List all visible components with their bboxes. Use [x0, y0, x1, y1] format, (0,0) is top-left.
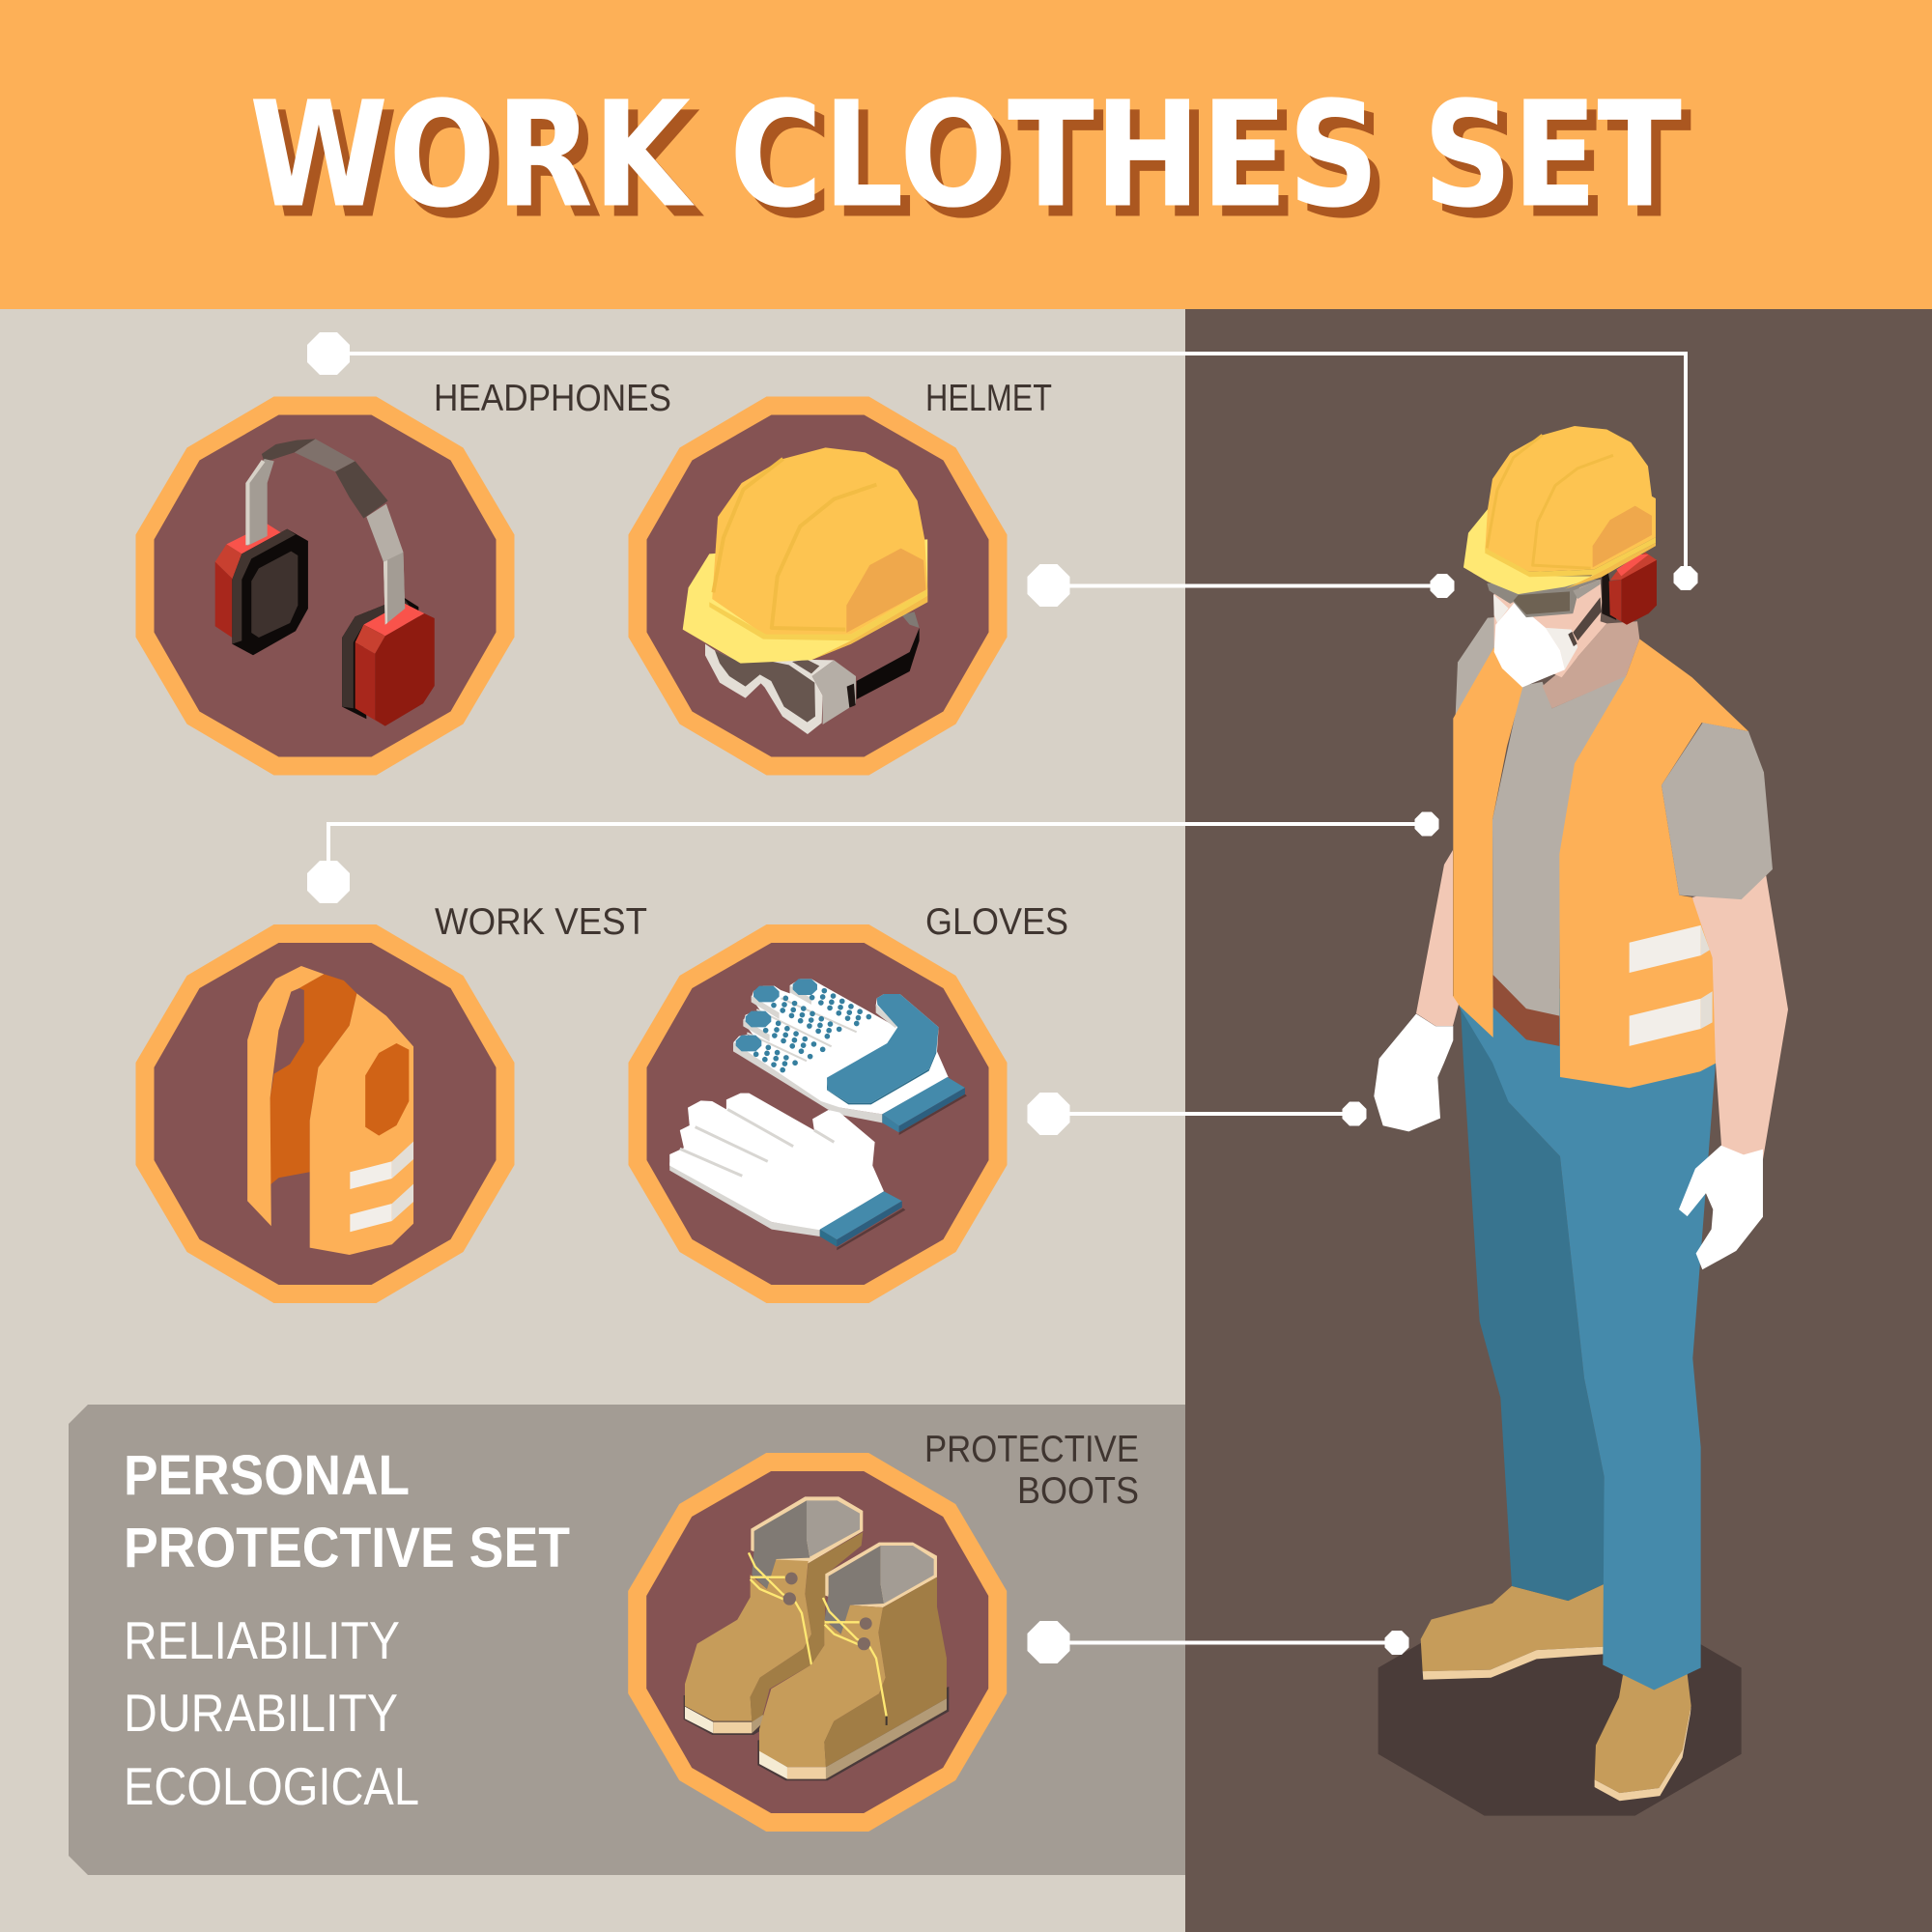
badge: gloves	[628, 924, 1007, 1303]
badge: helmet	[628, 396, 1007, 775]
title: WORK	[249, 70, 695, 240]
label: protective boots: PROTECTIVE	[924, 1429, 1139, 1470]
label: work vest: WORK VEST	[435, 901, 647, 943]
icon: goggles	[705, 611, 920, 734]
title: SET	[1423, 70, 1682, 240]
icon: plain glove	[669, 1094, 905, 1250]
badge: work vest	[135, 924, 514, 1303]
worker head with mask and goggles	[1487, 553, 1657, 687]
badge: headphones	[135, 396, 514, 775]
connector: work vest	[307, 811, 1439, 903]
label: protective boots: BOOTS	[1017, 1470, 1139, 1512]
arm and glove: left	[1374, 850, 1460, 1131]
text block: personal protective set: DURABILITY	[124, 1683, 398, 1743]
connector: gloves	[1028, 1093, 1366, 1135]
text block: personal protective set: PROTECTIVE SET	[124, 1517, 570, 1579]
text block: personal protective set	[124, 1444, 570, 1816]
text block: personal protective set: ECOLOGICAL	[124, 1756, 419, 1816]
title	[249, 70, 1691, 251]
worker helmet	[1463, 426, 1656, 594]
icon: boots	[684, 1496, 949, 1780]
arm and glove: right	[1679, 874, 1788, 1269]
text block: personal protective set: PERSONAL	[124, 1444, 410, 1507]
figure: worker	[1374, 426, 1788, 1816]
icon: helmet	[683, 447, 927, 664]
connector: headphones	[307, 332, 1698, 590]
worker lower body	[1421, 988, 1717, 1801]
connector: boots	[1028, 1621, 1408, 1663]
label: headphones: HEADPHONES	[434, 378, 671, 419]
badge: protective boots	[628, 1453, 1007, 1832]
title: CLOTHES	[729, 70, 1379, 240]
icon: headphones	[215, 439, 435, 726]
worker upper body	[1453, 617, 1773, 1088]
title: CLOTHES	[739, 81, 1389, 251]
title: WORK	[259, 81, 704, 251]
label: protective boots	[924, 1429, 1139, 1512]
icon: vest	[247, 966, 413, 1255]
text block: personal protective set: RELIABILITY	[124, 1610, 400, 1670]
platform	[1378, 1606, 1742, 1816]
title: SET	[1433, 81, 1691, 251]
connector: helmet	[1028, 564, 1455, 607]
icon: dotted glove	[733, 979, 967, 1135]
label: gloves: GLOVES	[925, 901, 1068, 943]
label: helmet: HELMET	[925, 378, 1052, 419]
panel: personal protective set	[69, 1405, 1185, 1875]
header banner	[0, 0, 1932, 309]
